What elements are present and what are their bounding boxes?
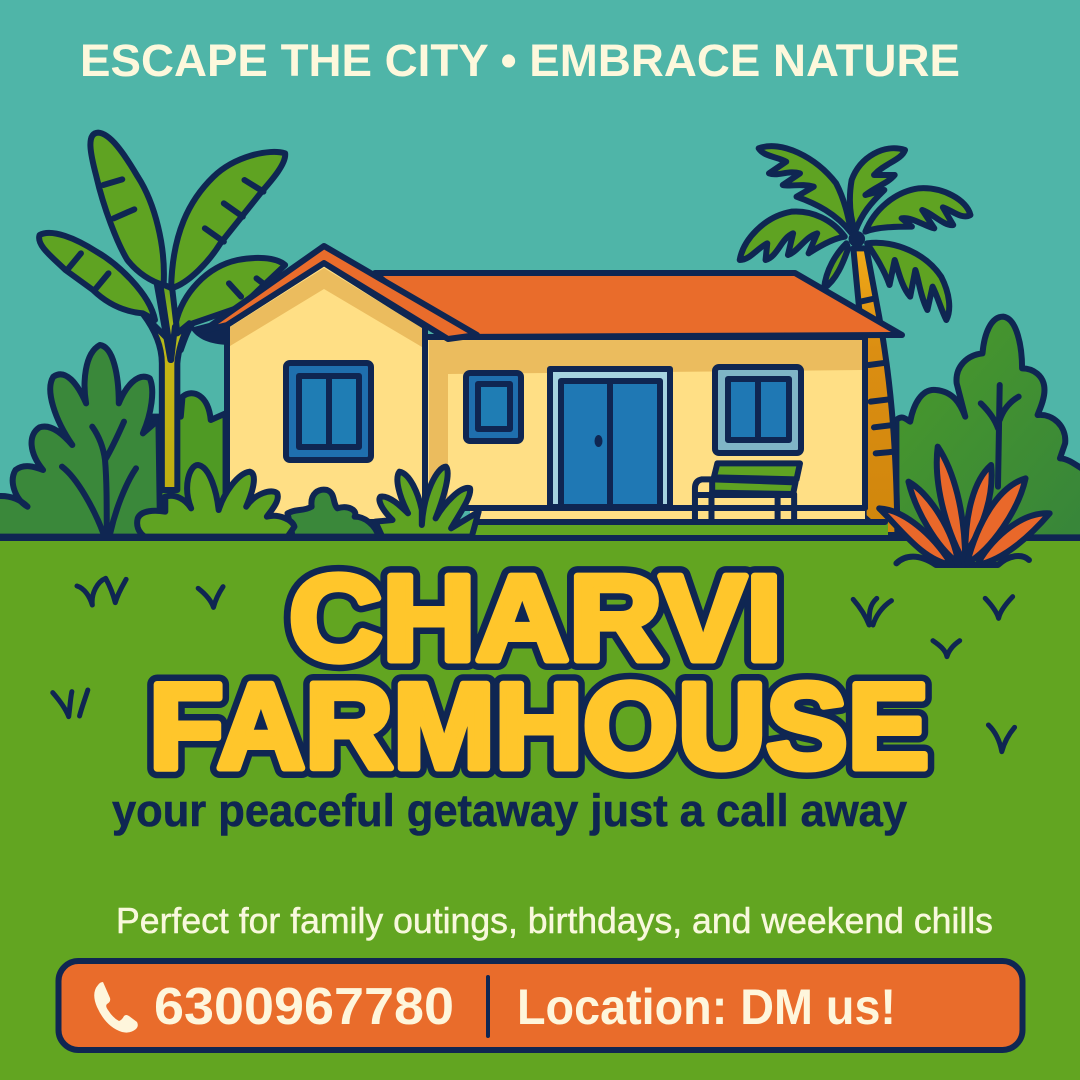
bar background — [58, 961, 1022, 1050]
front bush right — [375, 467, 479, 537]
header tagline: ESCAPE THE CITY • EMBRACE NATURE — [80, 35, 960, 86]
title — [149, 550, 929, 794]
contact bar — [58, 961, 1022, 1050]
window right — [715, 367, 801, 453]
bush veins — [62, 422, 136, 535]
banana leaf lower right — [176, 258, 285, 350]
bench — [695, 463, 800, 520]
location: Location: DM us! — [517, 979, 896, 1035]
title line 1: CHARVI — [289, 550, 782, 686]
palm frond lower left — [824, 243, 848, 288]
illustration: left plants — [0, 133, 285, 537]
door — [550, 369, 670, 507]
palm frond top right — [850, 148, 905, 232]
window left — [286, 363, 371, 460]
description: Perfect for family outings, birthdays, and weekend chills — [116, 900, 993, 941]
palm frond left — [740, 211, 845, 260]
main roof — [375, 273, 902, 337]
palm trunk — [853, 248, 897, 535]
eave shadow — [190, 318, 228, 345]
wall shadow — [429, 340, 862, 505]
back bush — [152, 393, 226, 537]
front bush centre — [288, 490, 379, 537]
farmhouse — [190, 246, 902, 537]
gable shadow — [230, 268, 422, 347]
main wing wall — [425, 337, 865, 508]
icon: phone — [94, 982, 138, 1033]
title line 1: CHARVI — [289, 550, 782, 686]
right bush — [896, 317, 1080, 537]
grass field — [0, 538, 1080, 1080]
banana leaf top — [90, 133, 164, 285]
subtitle: your peaceful getaway just a call away — [112, 785, 907, 836]
banana stem — [143, 283, 189, 490]
palm tree — [740, 146, 970, 535]
front bush left — [137, 465, 294, 537]
window small — [466, 373, 521, 441]
ground curves — [896, 556, 1029, 565]
title line 2: FARMHOUSE — [149, 658, 929, 794]
palm frond right — [865, 188, 970, 232]
left dark bush — [0, 345, 160, 537]
palm hub — [849, 231, 865, 247]
foreground plants — [137, 465, 479, 537]
gable wall — [227, 263, 425, 522]
illustration: right bush and palm — [740, 146, 1080, 537]
banana leaf left — [39, 233, 155, 320]
ground line — [0, 535, 1080, 541]
porch — [470, 508, 888, 537]
banana plant — [39, 133, 285, 490]
bush stem — [981, 385, 1019, 487]
title line 2: FARMHOUSE — [149, 658, 929, 794]
red plant — [879, 447, 1050, 565]
banana leaf upper right — [171, 152, 285, 288]
grass tufts — [53, 578, 1015, 752]
palm frond lower right — [867, 243, 949, 320]
phone number: 6300967780 — [154, 978, 454, 1036]
gable roof band — [203, 246, 477, 339]
divider — [486, 975, 490, 1038]
palm frond top left — [759, 146, 852, 233]
